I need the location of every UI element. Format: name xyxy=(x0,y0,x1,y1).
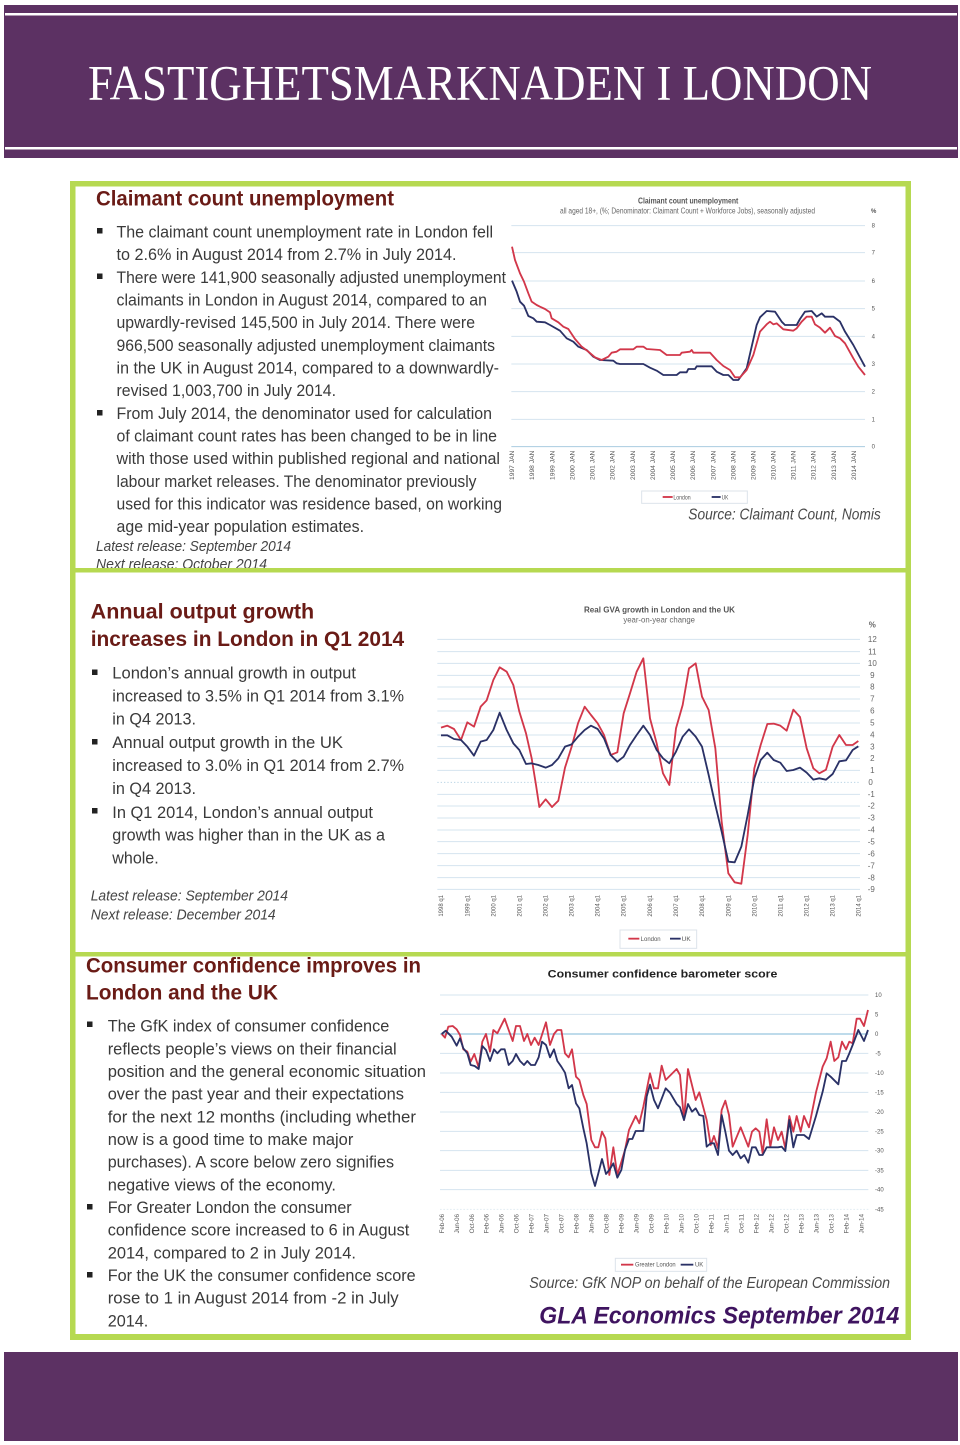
line chart: real GVA growth: 2014 q1 xyxy=(856,894,862,917)
line chart: real GVA growth: 2006 q1 xyxy=(648,894,654,917)
text block: confidence bullets: purchases). A score below zero signifies xyxy=(108,1153,394,1172)
line chart: real GVA growth: -2 xyxy=(868,802,875,811)
line chart: claimant count: 2011 JAN xyxy=(792,451,798,480)
line chart: claimant count: 1998 JAN xyxy=(530,451,536,480)
text block: claimant bullets: in the UK in August 2014, compared to a downwardly- xyxy=(116,358,499,378)
line chart: consumer confidence barometer: Feb-07 xyxy=(530,1213,536,1233)
line chart: claimant count: 2010 JAN xyxy=(771,451,777,480)
text block: output bullets: in Q4 2013. xyxy=(112,710,196,729)
line chart: claimant count: 1999 JAN xyxy=(550,451,556,480)
line chart: real GVA growth: 8 xyxy=(870,683,875,692)
heading: claimant count: Claimant count unemployment xyxy=(96,188,394,211)
line chart: consumer confidence barometer: -10 xyxy=(875,1071,884,1077)
line chart: consumer confidence barometer: Feb-06 xyxy=(485,1213,491,1233)
release dates: output xyxy=(91,888,288,923)
line chart: consumer confidence barometer: Jun-14 xyxy=(860,1213,866,1233)
text block: output bullets: growth was higher than in the UK as a xyxy=(112,826,386,845)
line chart: real GVA growth: 2013 q1 xyxy=(830,894,836,917)
line chart: consumer confidence barometer: Jun-09 xyxy=(635,1213,641,1233)
text block: confidence bullets: for the next 12 months (including whether xyxy=(108,1107,416,1126)
line chart: consumer confidence barometer: Oct-08 xyxy=(605,1213,611,1233)
line chart: claimant count: 2014 JAN xyxy=(852,451,858,480)
line chart: real GVA growth: -8 xyxy=(868,873,875,882)
line chart: consumer confidence barometer: -45 xyxy=(875,1207,884,1213)
line chart: claimant count: 2012 JAN xyxy=(812,451,818,480)
line chart: real GVA growth: 1999 q1 xyxy=(465,894,471,917)
text block: confidence bullets: The GfK index of consumer confidence xyxy=(108,1017,389,1036)
line chart: consumer confidence barometer: Oct-12 xyxy=(785,1213,791,1233)
line chart: claimant count: 7 xyxy=(872,251,876,257)
line chart: consumer confidence barometer: Consumer confidence barometer score xyxy=(548,969,777,981)
text block: claimant bullets: The claimant count unemployment rate in London fell xyxy=(116,222,493,242)
heading: output growth xyxy=(91,600,405,651)
line chart: consumer confidence barometer: Jun-12 xyxy=(770,1213,776,1233)
line chart: consumer confidence barometer: Jun-07 xyxy=(545,1213,551,1233)
panel: consumer confidence xyxy=(86,954,899,1330)
line chart: consumer confidence barometer: Oct-07 xyxy=(560,1213,566,1233)
line chart: consumer confidence barometer: -5 xyxy=(875,1051,881,1057)
text block: output bullets: Annual output growth in the UK xyxy=(112,733,344,752)
line chart: claimant count: 2001 JAN xyxy=(591,451,597,480)
line chart: consumer confidence barometer xyxy=(440,969,884,1271)
line chart: consumer confidence barometer: Feb-06 xyxy=(440,1213,446,1233)
line chart: consumer confidence barometer: -35 xyxy=(875,1168,884,1174)
text block: claimant bullets: with those used within published regional and national xyxy=(116,449,500,468)
heading: consumer confidence: London and the UK xyxy=(86,981,278,1004)
panel: claimant count unemployment xyxy=(75,186,906,573)
line chart: consumer confidence barometer: Oct-13 xyxy=(830,1213,836,1233)
line chart: real GVA growth: 5 xyxy=(870,719,875,728)
line chart: consumer confidence barometer: UK xyxy=(695,1263,703,1269)
line chart: real GVA growth: 1998 q1 xyxy=(439,894,445,917)
text block: claimant bullets: There were 141,900 seasonally adjusted unemployment xyxy=(116,268,506,287)
line chart: real GVA growth: -4 xyxy=(868,826,875,835)
line chart: claimant count: % xyxy=(871,209,877,215)
line chart: claimant count: 1997 JAN xyxy=(510,451,516,480)
line chart: claimant count: 5 xyxy=(872,307,876,313)
panel: annual output growth xyxy=(91,600,877,948)
line chart: real GVA growth: 9 xyxy=(870,671,875,680)
line chart: claimant count: 3 xyxy=(872,362,876,368)
title: FASTIGHETSMARKNADEN I LONDON xyxy=(88,54,872,110)
line chart: real GVA growth: 12 xyxy=(868,635,877,644)
text block: output bullets: London’s annual growth in output xyxy=(112,663,356,682)
line chart: claimant count: 2013 JAN xyxy=(832,451,838,480)
line chart: claimant count: 2 xyxy=(872,390,876,396)
line chart: real GVA growth: 2003 q1 xyxy=(570,894,576,917)
line chart: claimant count: 2005 JAN xyxy=(671,451,677,480)
line chart: claimant count: UK xyxy=(722,495,728,501)
text block: confidence bullets: For the UK the consumer confidence score xyxy=(108,1266,416,1285)
line chart: real GVA growth: 7 xyxy=(870,695,875,704)
line chart: real GVA growth: 2012 q1 xyxy=(804,894,810,917)
release dates: claimant: Latest release: September 2014 xyxy=(96,538,291,555)
line chart: real GVA growth: London xyxy=(641,937,661,943)
line chart: consumer confidence barometer: Oct-11 xyxy=(740,1213,746,1233)
line chart: consumer confidence barometer: Oct-06 xyxy=(470,1213,476,1233)
text block: output bullets: increased to 3.0% in Q1 2014 from 2.7% xyxy=(112,756,404,775)
header banner xyxy=(4,5,958,158)
text block: output bullets: In Q1 2014, London’s annual output xyxy=(112,803,373,822)
text block: confidence bullets: over the past year and their expectations xyxy=(108,1085,404,1104)
text block: claimant bullets: claimants in London in August 2014, compared to an xyxy=(116,290,487,310)
source: claimant count: Source: Claimant Count, Nomis xyxy=(688,506,881,523)
heading: output growth: Annual output growth xyxy=(91,600,314,623)
text block: output bullets: in Q4 2013. xyxy=(112,779,196,798)
text block: claimant bullets: revised 1,003,700 in July 2014. xyxy=(116,381,336,400)
credit: GLA Economics: GLA Economics September 2014 xyxy=(539,1302,899,1329)
line chart: claimant count: all aged 18+, (%; Denominator: Claimant Count + Workforce Jobs), seasonally adjusted xyxy=(560,206,815,216)
line chart: consumer confidence barometer: Feb-11 xyxy=(710,1213,716,1233)
text block: claimant bullets: From July 2014, the denominator used for calculation xyxy=(116,404,492,423)
line chart: consumer confidence barometer: Oct-06 xyxy=(515,1213,521,1233)
line chart: real GVA growth: 4 xyxy=(870,731,875,740)
line chart: real GVA growth: -3 xyxy=(868,814,875,823)
line chart: real GVA growth: -1 xyxy=(868,790,875,799)
line chart: real GVA growth: 2008 q1 xyxy=(700,894,706,917)
line chart: real GVA growth: % xyxy=(869,621,876,630)
line chart: real GVA growth: Real GVA growth in London and the UK xyxy=(584,604,735,614)
heading: consumer confidence: Consumer confidence improves in xyxy=(86,954,421,977)
text block: claimant bullets: of claimant count rates has been changed to be in line xyxy=(116,426,497,446)
text block: confidence bullets: reflects people’s views on their financial xyxy=(108,1039,397,1058)
line chart: consumer confidence barometer: -25 xyxy=(875,1129,884,1135)
line chart: consumer confidence barometer: -30 xyxy=(875,1149,884,1155)
line chart: claimant count xyxy=(510,195,877,503)
line chart: consumer confidence barometer: 0 xyxy=(875,1032,879,1038)
line chart: consumer confidence barometer: Jun-06 xyxy=(455,1213,461,1233)
line chart: consumer confidence barometer: Jun-08 xyxy=(590,1213,596,1233)
line chart: consumer confidence barometer: Feb-13 xyxy=(800,1213,806,1233)
text block: claimant bullets: labour market releases. The denominator previously xyxy=(116,472,477,491)
text block: confidence bullets: For Greater London the consumer xyxy=(108,1198,352,1217)
text block: claimant bullets: used for this indicator was residence based, on working xyxy=(116,494,502,514)
line chart: claimant count: 2009 JAN xyxy=(751,451,757,480)
line chart: real GVA growth: 3 xyxy=(870,742,875,751)
line chart: consumer confidence barometer: Jun-10 xyxy=(680,1213,686,1233)
line chart: claimant count: 2004 JAN xyxy=(651,451,657,480)
line chart: real GVA growth: -9 xyxy=(868,885,875,894)
line chart: real GVA growth: 11 xyxy=(868,647,877,656)
release dates: claimant: Next release: October 2014 xyxy=(96,556,267,573)
line chart: real GVA growth xyxy=(437,604,877,948)
line chart: real GVA growth: 2 xyxy=(870,754,875,763)
line chart: consumer confidence barometer: Greater London xyxy=(635,1263,676,1269)
text block: claimant bullets: to 2.6% in August 2014 from 2.7% in July 2014. xyxy=(116,245,456,264)
text block: confidence bullets: 2014. xyxy=(108,1311,148,1330)
line chart: consumer confidence barometer: Feb-10 xyxy=(665,1213,671,1233)
line chart: real GVA growth: 2004 q1 xyxy=(596,894,602,917)
line chart: real GVA growth: -6 xyxy=(868,849,875,858)
line chart: consumer confidence barometer: -20 xyxy=(875,1110,884,1116)
line chart: consumer confidence barometer: Feb-12 xyxy=(755,1213,761,1233)
line chart: consumer confidence barometer: 10 xyxy=(875,993,882,999)
line chart: claimant count: London xyxy=(673,495,691,501)
line chart: real GVA growth: 10 xyxy=(868,659,877,668)
line chart: claimant count: 2003 JAN xyxy=(631,451,637,480)
line chart: consumer confidence barometer: Jun-06 xyxy=(500,1213,506,1233)
line chart: consumer confidence barometer: Feb-08 xyxy=(575,1213,581,1233)
text block: confidence bullets: negative views of the economy. xyxy=(108,1175,336,1194)
line chart: real GVA growth: 1 xyxy=(870,766,875,775)
source: consumer confidence: Source: GfK NOP on behalf of the European Commission xyxy=(529,1275,890,1292)
text block: output bullets: whole. xyxy=(111,849,159,868)
text block: claimant bullets: age mid-year population estimates. xyxy=(116,517,364,536)
heading: consumer confidence xyxy=(86,954,421,1004)
heading: output growth: increases in London in Q1 2014 xyxy=(91,628,405,651)
line chart: real GVA growth: 2010 q1 xyxy=(752,894,758,917)
text block: output bullets xyxy=(92,663,404,868)
footer band xyxy=(4,1352,958,1441)
line chart: real GVA growth: 2005 q1 xyxy=(622,894,628,917)
text block: claimant bullets: 966,500 seasonally adjusted unemployment claimants xyxy=(116,336,495,355)
line chart: consumer confidence barometer: Oct-10 xyxy=(695,1213,701,1233)
line chart: real GVA growth: UK xyxy=(682,937,691,943)
line chart: real GVA growth: 6 xyxy=(870,707,875,716)
text block: claimant bullets xyxy=(97,222,506,536)
line chart: claimant count: 2008 JAN xyxy=(731,451,737,480)
text block: confidence bullets xyxy=(87,1017,426,1330)
line chart: claimant count: 2002 JAN xyxy=(611,451,617,480)
line chart: consumer confidence barometer: -40 xyxy=(875,1188,884,1194)
line chart: real GVA growth: 2007 q1 xyxy=(674,894,680,917)
line chart: real GVA growth: 0 xyxy=(868,778,873,787)
line chart: claimant count: 2007 JAN xyxy=(711,451,717,480)
line chart: consumer confidence barometer: Feb-14 xyxy=(845,1213,851,1233)
line chart: real GVA growth: year-on-year change xyxy=(623,615,695,625)
text block: confidence bullets: confidence score increased to 6 in August xyxy=(108,1221,410,1240)
line chart: claimant count: 4 xyxy=(872,334,876,340)
text block: output bullets: increased to 3.5% in Q1 2014 from 3.1% xyxy=(112,686,404,705)
line chart: claimant count: Claimant count unemployment xyxy=(638,195,739,205)
line chart: consumer confidence barometer: 5 xyxy=(875,1012,879,1018)
line chart: claimant count: 2006 JAN xyxy=(691,451,697,480)
line chart: claimant count: 8 xyxy=(872,224,876,230)
text block: confidence bullets: 2014, compared to 2 in July 2014. xyxy=(108,1243,356,1262)
line chart: consumer confidence barometer: Feb-09 xyxy=(620,1213,626,1233)
line chart: claimant count: 0 xyxy=(872,445,876,451)
line chart: consumer confidence barometer: Jun-11 xyxy=(725,1213,731,1233)
line chart: real GVA growth: 2001 q1 xyxy=(517,894,523,917)
line chart: real GVA growth: 2000 q1 xyxy=(491,894,497,917)
line chart: real GVA growth: -5 xyxy=(868,837,875,846)
release dates: output: Next release: December 2014 xyxy=(91,906,276,923)
text block: claimant bullets: upwardly-revised 145,500 in July 2014. There were xyxy=(116,313,475,332)
line chart: consumer confidence barometer: Oct-09 xyxy=(650,1213,656,1233)
text block: confidence bullets: position and the general economic situation xyxy=(108,1062,426,1081)
green frame with panel dividers xyxy=(70,181,911,1340)
text block: confidence bullets: rose to 1 in August 2014 from -2 in July xyxy=(108,1289,399,1308)
line chart: claimant count: 6 xyxy=(872,279,876,285)
line chart: claimant count: 1 xyxy=(872,417,876,423)
text block: confidence bullets: now is a good time to make major xyxy=(108,1130,354,1149)
line chart: consumer confidence barometer: Jun-13 xyxy=(815,1213,821,1233)
line chart: real GVA growth: -7 xyxy=(868,861,875,870)
release dates: claimant xyxy=(96,538,291,573)
line chart: real GVA growth: 2009 q1 xyxy=(726,894,732,917)
release dates: output: Latest release: September 2014 xyxy=(91,888,288,905)
line chart: claimant count: 2000 JAN xyxy=(570,451,576,480)
line chart: consumer confidence barometer: -15 xyxy=(875,1090,884,1096)
line chart: real GVA growth: 2011 q1 xyxy=(778,894,784,917)
line chart: real GVA growth: 2002 q1 xyxy=(544,894,550,917)
